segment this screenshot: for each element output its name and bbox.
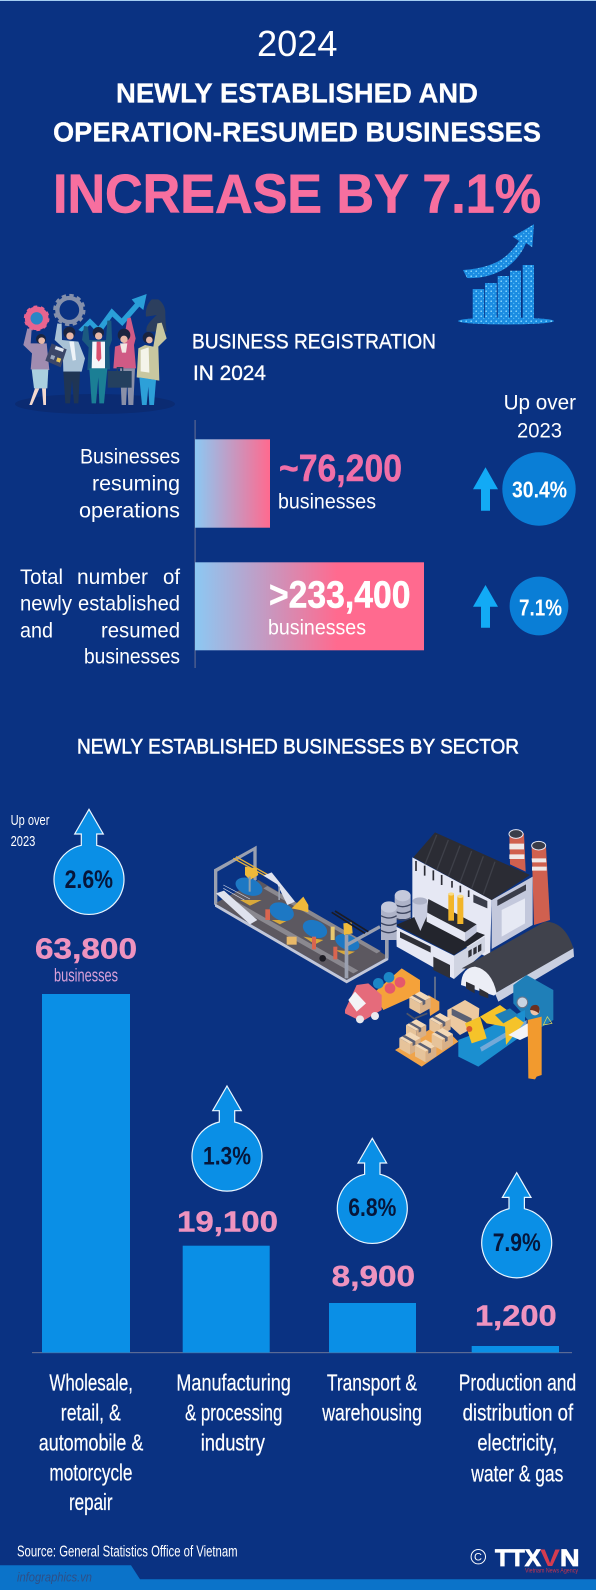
sector label: production and distribution: distribution of (463, 1400, 574, 1426)
sector label: wholesale: retail, & (61, 1400, 121, 1426)
logo: TTXVN: N (560, 1545, 580, 1572)
value: 76,200 businesses (278, 448, 402, 513)
sector column: transport: 8,900 (332, 1261, 415, 1293)
logo: TTXVN: Vietnam News Agency (525, 1568, 578, 1574)
arrow up: 30.4% (473, 467, 498, 511)
title: OPERATION-RESUMED BUSINESSES (53, 117, 541, 148)
up over 2023 caption: Up over (504, 391, 576, 414)
label: businesses resuming operations (79, 445, 180, 522)
axis: sector chart (32, 1352, 572, 1353)
label: total newly established and resumed businesses: established (78, 593, 180, 616)
label: businesses resuming operations: resuming (92, 473, 180, 496)
label: businesses resuming operations: Businesses (80, 445, 180, 468)
label: total newly established and resumed businesses: businesses (84, 645, 180, 668)
up over 2023 caption: sector chart: Up over (11, 812, 49, 829)
logo: TTXVN (471, 1545, 580, 1574)
icon: glowing growth chart (458, 224, 554, 324)
sector label: wholesale: motorcycle (49, 1460, 132, 1486)
logo: TTXVN: TTX (495, 1545, 541, 1572)
sector label: manufacturing: Manufacturing (176, 1370, 291, 1396)
source note: Source: General Statistics Office of Vietnam (17, 1544, 238, 1561)
sector column: wholesale: 63,800 (35, 933, 137, 965)
label: total newly established and resumed businesses: and (20, 619, 53, 642)
badge: 7.1% (510, 577, 568, 635)
sector label: wholesale (39, 1370, 143, 1515)
title (53, 78, 541, 148)
footer band (0, 1565, 596, 1590)
sector column: transport (329, 1261, 416, 1353)
illustration: team with gears and rising arrow (15, 294, 175, 414)
illustration: production line (214, 846, 389, 983)
year heading: 2024 (257, 23, 338, 64)
pin badge: 7.9% (482, 1173, 552, 1278)
up over 2023 caption: sector chart: 2023 (11, 833, 35, 850)
sector label: manufacturing (176, 1370, 291, 1456)
label: total newly established and resumed businesses (20, 566, 180, 668)
logo: TTXVN: V (540, 1545, 560, 1572)
illustration: truck, boxes and machine operator (345, 968, 553, 1079)
sector label: production and distribution: water & gas (471, 1460, 563, 1486)
sector column: manufacturing (177, 1207, 278, 1353)
pin badge: 7.9%: 7.9% (493, 1229, 541, 1257)
value: 76,200 businesses: businesses (278, 490, 376, 513)
arrow up: 7.1% (473, 585, 498, 628)
label: total newly established and resumed businesses: Total (20, 566, 63, 589)
badge: 7.1%: 7.1% (519, 595, 562, 621)
up over 2023 caption: sector chart (11, 812, 49, 850)
pin badge: 2.6% (54, 809, 124, 914)
badge: 30.4%: 30.4% (512, 476, 567, 502)
sector label: transport: Transport & (327, 1370, 417, 1396)
sector column: wholesale: businesses (54, 966, 118, 986)
pin badge: 6.8%: 6.8% (348, 1194, 396, 1222)
value: 233,400 businesses: businesses (268, 616, 366, 639)
section heading: by sector: NEWLY ESTABLISHED BUSINESSES BY SECTOR (77, 735, 519, 758)
heading: business registration in 2024 (192, 330, 436, 385)
headline: increase by 7.1%: INCREASE BY 7.1% (53, 162, 541, 224)
sector label: wholesale: Wholesale, (49, 1370, 133, 1396)
pin badge: 6.8% (337, 1138, 407, 1243)
up over 2023 caption: 2023 (517, 419, 562, 442)
website credit: infographics.vn (17, 1570, 92, 1585)
illustration: factory with chimneys (381, 830, 574, 1002)
sector label: production and distribution: electricity, (477, 1430, 557, 1456)
pin badge: 1.3%: 1.3% (203, 1142, 251, 1170)
sector label: production and distribution (459, 1370, 576, 1486)
label: total newly established and resumed businesses: of (163, 566, 180, 589)
value: 76,200 businesses: ~76,200 (279, 448, 402, 490)
label: businesses resuming operations: operations (79, 499, 180, 522)
sector label: manufacturing: industry (201, 1430, 265, 1456)
sector label: transport (322, 1370, 422, 1426)
heading: business registration in 2024: IN 2024 (193, 362, 266, 385)
sector column: production and distribution: 1,200 (475, 1300, 557, 1332)
bar chart axis (194, 420, 196, 668)
sector label: manufacturing: & processing (185, 1400, 282, 1426)
up over 2023 caption (504, 391, 576, 442)
sector column: manufacturing: 19,100 (177, 1207, 278, 1239)
sector label: wholesale: repair (69, 1489, 113, 1515)
value: 233,400 businesses: >233,400 (269, 574, 410, 616)
sector label: wholesale: automobile & (39, 1430, 143, 1456)
sector column: production and distribution (472, 1300, 559, 1353)
bar: businesses resuming operations (195, 439, 270, 528)
sector label: transport: warehousing (322, 1400, 422, 1426)
label: total newly established and resumed businesses: newly (20, 593, 72, 616)
pin badge: 1.3% (192, 1086, 262, 1191)
value: 233,400 businesses (268, 574, 410, 639)
bar: total newly established and resumed businesses (195, 562, 424, 650)
title: NEWLY ESTABLISHED AND (116, 78, 478, 109)
sector column: wholesale (35, 933, 137, 1353)
logo: TTXVN: C (474, 1552, 482, 1564)
label: total newly established and resumed businesses: resumed (101, 619, 180, 642)
heading: business registration in 2024: BUSINESS REGISTRATION (192, 330, 436, 353)
label: total newly established and resumed businesses: number (77, 566, 148, 589)
pin badge: 2.6%: 2.6% (65, 866, 113, 894)
badge: 30.4% (502, 452, 576, 526)
